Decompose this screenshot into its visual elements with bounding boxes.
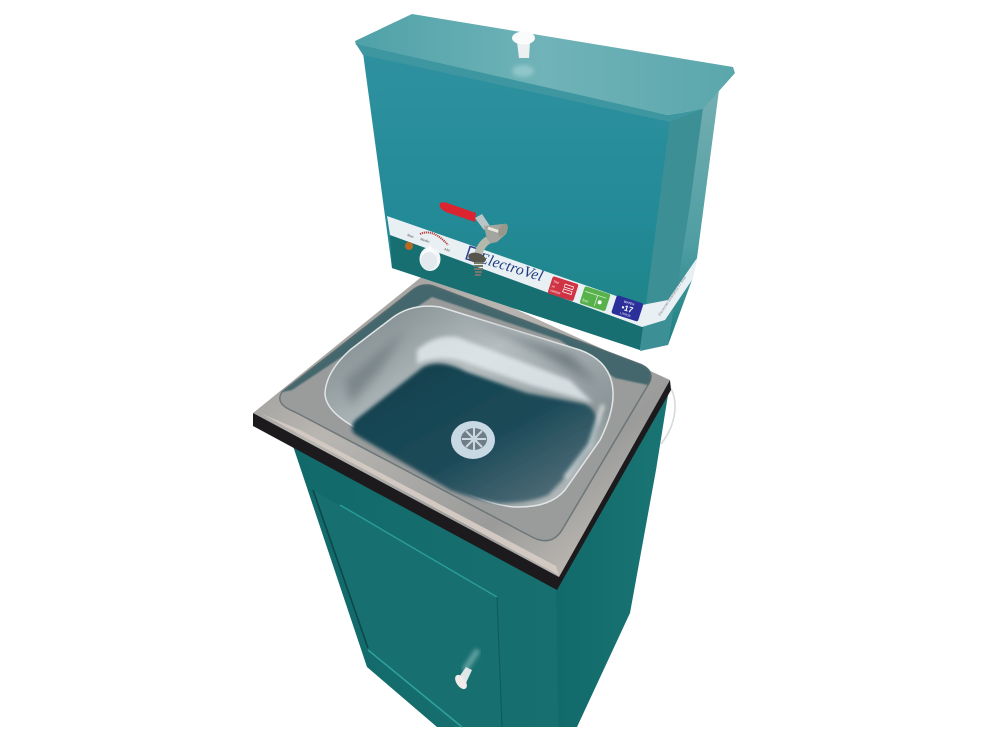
thermostat knob bbox=[420, 245, 440, 271]
rear wall reflection bbox=[417, 337, 593, 403]
rim shadow band at rear bbox=[282, 285, 651, 392]
cabinet door bbox=[313, 490, 502, 727]
front bright strip bbox=[262, 414, 559, 575]
power cable bbox=[661, 384, 675, 444]
red badge: AI bbox=[551, 284, 555, 289]
panel: sink top bbox=[253, 270, 671, 590]
basin bottom bbox=[352, 363, 597, 503]
cabinet side bbox=[556, 385, 671, 727]
basin wall bbox=[325, 306, 613, 507]
lower tank shadow bbox=[390, 235, 643, 350]
small dial text: Max bbox=[407, 233, 414, 239]
right wall highlight bbox=[565, 405, 603, 478]
dark reflection bbox=[470, 318, 598, 385]
faucet bbox=[440, 202, 510, 275]
green badge bbox=[579, 286, 611, 311]
drain bbox=[451, 421, 495, 459]
blue badge: •17 bbox=[620, 303, 635, 315]
blue badge bbox=[611, 295, 644, 322]
door knob bbox=[453, 650, 478, 691]
logo square bbox=[466, 246, 482, 263]
temperature dial marks bbox=[420, 232, 448, 245]
panel: lower cabinet bbox=[292, 384, 675, 727]
blue badge: WATER bbox=[623, 300, 636, 307]
label band: Alto bbox=[444, 247, 451, 253]
brand logo: ElectroVel bbox=[476, 249, 545, 285]
rim bbox=[280, 285, 651, 541]
red badge bbox=[547, 276, 579, 301]
spout bbox=[478, 240, 488, 256]
green badge: Eco bbox=[582, 298, 589, 304]
red badge: TIM bbox=[553, 279, 560, 285]
blue badge: LITROS bbox=[620, 311, 631, 318]
label band: Medio bbox=[420, 237, 430, 244]
tank front bbox=[363, 53, 670, 350]
dark front edge bbox=[253, 380, 671, 590]
power indicator bbox=[405, 242, 413, 250]
lid knob bbox=[512, 32, 535, 77]
tank lid bbox=[355, 14, 735, 122]
hose thread bbox=[474, 263, 483, 275]
spout collar bbox=[467, 251, 487, 265]
red handle bbox=[440, 202, 476, 222]
cabinet front bbox=[292, 443, 560, 727]
handle stem bbox=[475, 214, 490, 230]
left wall reflection bbox=[345, 330, 405, 405]
side label text: ElectroVel lavamanos 17 litros bbox=[658, 275, 687, 317]
red badge: WATER bbox=[550, 289, 562, 296]
valve body bbox=[484, 224, 507, 244]
label band bbox=[387, 216, 697, 327]
tank side far panel bbox=[655, 90, 719, 345]
panel: water tank bbox=[355, 14, 735, 351]
steel plate bbox=[253, 270, 670, 577]
tank chamfer bbox=[640, 108, 703, 351]
